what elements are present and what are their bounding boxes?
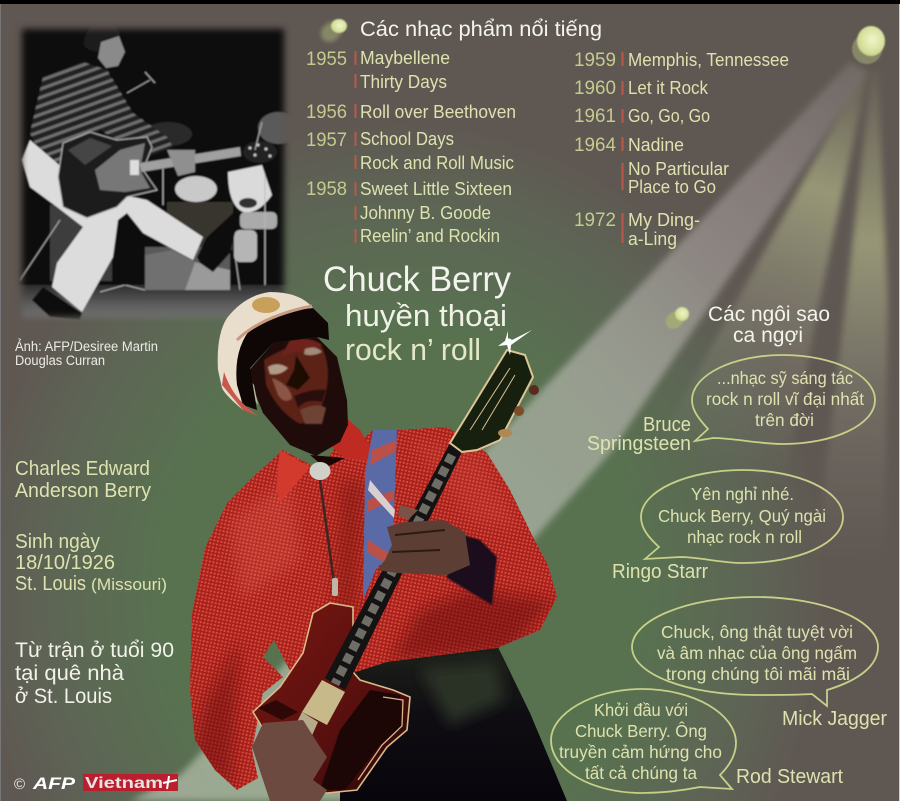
callout: Bruce Springsteen: Bruce <box>643 414 691 436</box>
song titles: Let it Rock <box>628 78 709 98</box>
callout: Mick Jagger: và âm nhạc của ông ngấm <box>657 643 857 663</box>
years: 1959 <box>574 50 616 71</box>
logo: AFP and VietnamPlus: AFP <box>32 774 76 793</box>
biography: Từ trận ở tuổi 90 <box>15 639 174 662</box>
biography: St. Louis <box>15 573 86 595</box>
shirt collar <box>276 450 310 503</box>
song titles: Go, Go, Go <box>628 106 710 126</box>
years: 1958 <box>306 179 347 200</box>
title: rock n’ roll <box>345 332 481 367</box>
trousers <box>340 645 567 801</box>
song titles: Reelin’ and Rockin <box>360 226 500 246</box>
lower hand <box>252 720 327 801</box>
section heading: Các ngôi sao <box>708 303 830 326</box>
section: famous songs <box>306 18 789 249</box>
callout: Bruce Springsteen: Springsteen <box>587 433 691 455</box>
callout: Bruce Springsteen: rock n roll vĩ đại nhất <box>706 389 864 409</box>
portrait: Chuck Berry with guitar <box>190 292 567 801</box>
biography: ở St. Louis <box>15 685 112 708</box>
section heading <box>708 303 830 347</box>
guitar body <box>253 603 410 793</box>
biography: Anderson Berry <box>15 480 151 502</box>
sparkle on headstock <box>498 330 532 355</box>
song titles: Sweet Little Sixteen <box>360 179 512 199</box>
song dividers <box>354 51 624 243</box>
years: 1955 <box>306 49 347 70</box>
song titles: Thirty Days <box>360 72 447 92</box>
song titles: My Ding- <box>628 210 700 230</box>
photo caption <box>15 339 158 368</box>
years: 1964 <box>574 135 616 156</box>
callout: Mick Jagger <box>632 597 887 730</box>
callout: Mick Jagger: Mick Jagger <box>782 708 887 730</box>
logo: AFP and VietnamPlus <box>14 774 178 793</box>
biography: Sinh ngày <box>15 531 100 553</box>
icon: small spotlight <box>662 307 689 333</box>
bolo tie <box>310 462 338 596</box>
years: 1956 <box>306 102 347 123</box>
callout: Rod Stewart: Chuck Berry. Ông <box>575 720 707 741</box>
logo: AFP and VietnamPlus: Vietnam <box>85 775 163 792</box>
song titles <box>360 48 789 249</box>
icon: spotlight lamp top right <box>852 26 885 64</box>
biography: 18/10/1926 <box>15 552 115 574</box>
callout: Rod Stewart: tất cả chúng ta <box>585 763 697 783</box>
head <box>247 337 348 456</box>
spotlight beams <box>130 62 888 801</box>
callout: Ringo Starr: Yên nghỉ nhé. <box>691 484 794 504</box>
headstock <box>450 350 539 452</box>
years: 1972 <box>574 210 616 231</box>
section: stars' tributes <box>551 303 887 793</box>
biography: (Missouri) <box>91 576 167 594</box>
callout: Mick Jagger: Chuck, ông thật tuyệt vời <box>661 622 853 642</box>
biography <box>15 458 174 708</box>
callout: Mick Jagger: trong chúng tôi mãi mãi <box>666 664 850 684</box>
logo: AFP and VietnamPlus: © <box>14 776 25 793</box>
song titles: Place to Go <box>628 177 716 197</box>
captain hat <box>218 292 329 416</box>
guitar neck <box>293 443 462 740</box>
shirt <box>190 414 557 790</box>
callout: Bruce Springsteen: ...nhạc sỹ sáng tác <box>717 368 853 388</box>
biography: tại quê nhà <box>15 662 124 685</box>
photo caption: Ảnh: AFP/Desiree Martin <box>15 339 158 354</box>
icon: small spotlight <box>317 18 347 46</box>
song titles: Roll over Beethoven <box>360 102 516 122</box>
callout: Bruce Springsteen <box>587 355 875 455</box>
photo: Chuck Berry performing in black and white <box>10 20 298 325</box>
callout: Rod Stewart: truyền cảm hứng cho <box>559 742 722 762</box>
song titles: Maybellene <box>360 48 450 68</box>
callout: Bruce Springsteen: trên đời <box>755 410 814 430</box>
years: 1957 <box>306 130 347 151</box>
song titles: a-Ling <box>628 229 677 249</box>
callout: Ringo Starr: nhạc rock n roll <box>687 527 802 547</box>
upper hand <box>377 505 497 605</box>
years <box>306 49 616 231</box>
song titles: Johnny B. Goode <box>360 203 491 223</box>
title: huyền thoại <box>345 298 507 333</box>
song titles: School Days <box>360 129 454 149</box>
title: Chuck Berry <box>323 260 511 299</box>
song titles: Nadine <box>628 135 684 155</box>
photo caption: Douglas Curran <box>15 353 105 368</box>
years: 1961 <box>574 106 616 127</box>
song titles: Memphis, Tennessee <box>628 50 789 70</box>
section heading: ca ngợi <box>733 324 803 347</box>
biography: Charles Edward <box>15 458 150 480</box>
callout: Rod Stewart <box>551 689 843 793</box>
callout: Rod Stewart: Rod Stewart <box>736 766 843 788</box>
title <box>323 260 511 367</box>
callout: Ringo Starr: Ringo Starr <box>612 561 708 583</box>
section: famous songs: Các nhạc phẩm nổi tiếng <box>360 18 602 41</box>
guitar strap <box>363 430 397 600</box>
song titles: No Particular <box>628 159 729 179</box>
callout: Rod Stewart: Khởi đầu với <box>594 700 688 720</box>
years: 1960 <box>574 78 616 99</box>
callout: Ringo Starr: Chuck Berry, Quý ngài <box>658 506 826 526</box>
callout: Ringo Starr <box>612 470 843 583</box>
song titles: Rock and Roll Music <box>360 153 514 173</box>
